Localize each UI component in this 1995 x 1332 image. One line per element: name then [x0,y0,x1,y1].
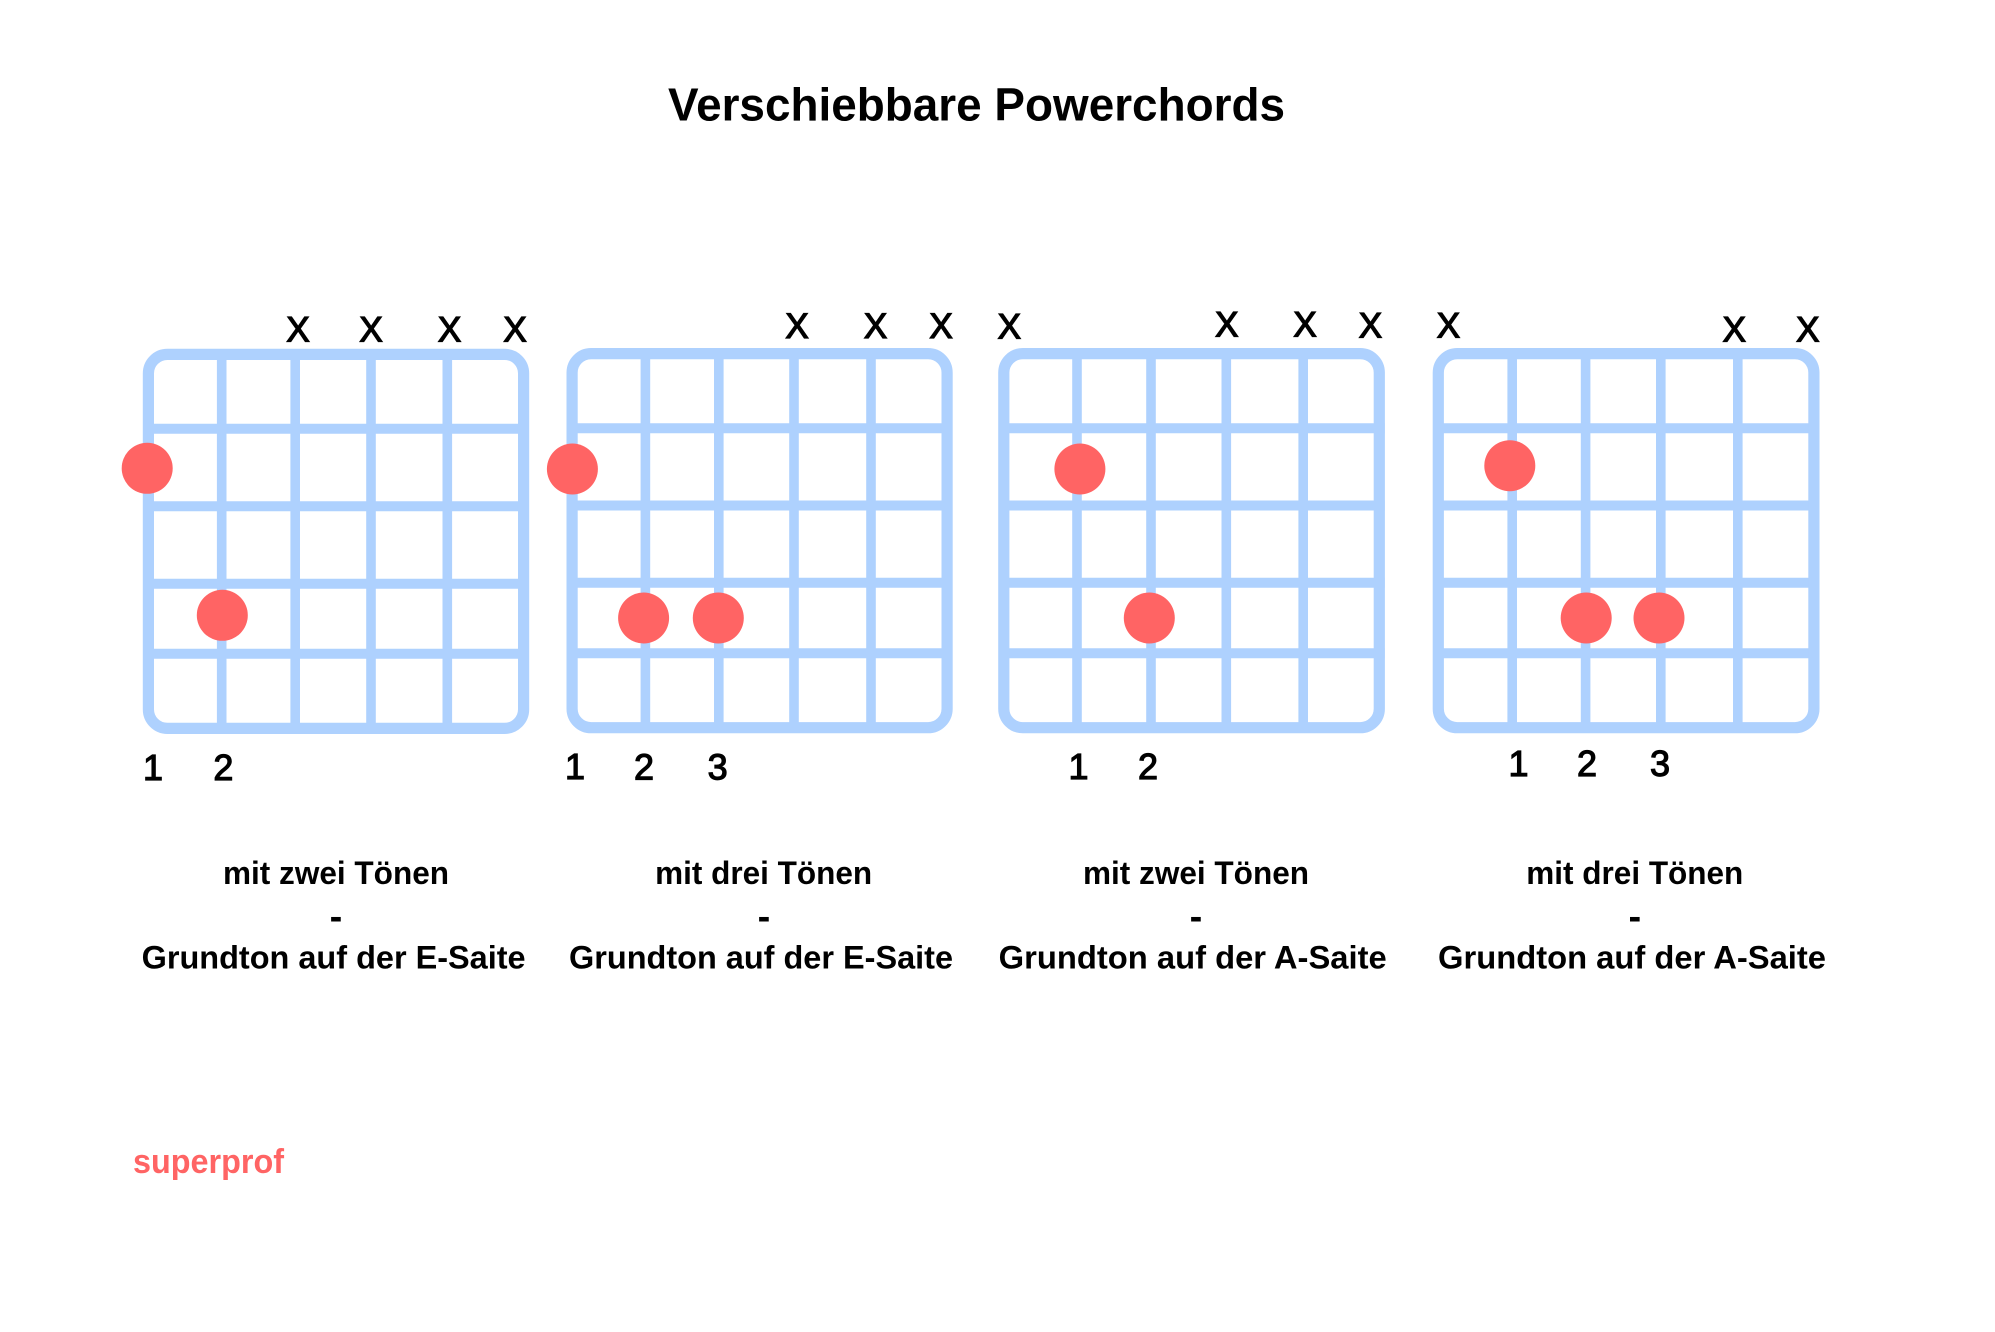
muted string markers: X [998,308,1021,346]
muted string markers: X [503,310,527,350]
muted string markers: X [929,307,953,346]
finger numbers: 3 [1650,743,1670,784]
finger numbers [143,747,233,788]
caption 4: mit drei Tönen [1526,855,1743,891]
caption 3: - [1190,896,1202,938]
finger numbers [1068,746,1158,787]
finger numbers [1508,743,1670,784]
fretboard grid [143,349,529,734]
caption 2: - [758,896,770,938]
finger dots [1484,440,1684,644]
finger numbers [565,746,728,788]
muted string markers: X [286,310,310,350]
finger numbers: 2 [1577,743,1597,784]
finger numbers: 2 [213,747,233,788]
muted string markers: X [1215,306,1238,344]
finger numbers: 1 [565,746,585,787]
muted string markers [286,310,527,350]
caption 2 [569,855,953,976]
caption 3 [999,855,1387,976]
panel: chord diagram 1, two notes, root on E string [122,310,529,788]
title: Verschiebbare Powerchords [668,78,1285,130]
muted string markers [1437,306,1819,350]
muted string markers: X [1359,306,1382,346]
caption 1 [142,855,526,976]
finger dots [122,443,248,641]
muted string markers: X [785,307,809,346]
muted string markers: X [1796,310,1819,350]
caption 1: Grundton auf der E-Saite [142,940,526,976]
finger numbers: 2 [634,746,654,788]
caption 1: - [330,896,342,938]
muted string markers [998,306,1382,346]
finger numbers: 2 [1138,746,1158,787]
caption 3: mit zwei Tönen [1083,855,1309,891]
finger numbers: 1 [1068,746,1089,787]
caption 3: Grundton auf der A-Saite [999,940,1387,976]
fretboard grid [998,348,1385,733]
caption 4: - [1628,896,1641,938]
caption 2: Grundton auf der E-Saite [569,940,953,976]
caption 4: Grundton auf der A-Saite [1438,940,1826,976]
brand logo: superprof: superprof [133,1143,285,1181]
caption 2: mit drei Tönen [655,855,872,891]
muted string markers: X [864,307,887,346]
caption 1: mit zwei Tönen [223,855,449,891]
muted string markers: X [438,310,461,350]
fretboard grid [1433,348,1819,733]
muted string markers: X [359,310,383,350]
muted string markers [785,307,953,346]
finger numbers: 1 [1508,743,1529,784]
panel: chord diagram 2, three notes, root on E string [547,307,953,788]
panel: chord diagram 4, three notes, root on A string [1433,306,1819,784]
muted string markers: X [1437,306,1460,346]
finger numbers: 3 [708,746,728,788]
caption 4 [1438,855,1826,976]
panel: chord diagram 3, two notes, root on A string [998,306,1385,787]
finger dots [547,444,744,644]
muted string markers: X [1723,310,1746,350]
finger dots [1054,444,1175,644]
fretboard grid [567,348,952,733]
muted string markers: X [1293,306,1317,344]
finger numbers: 1 [143,747,163,788]
